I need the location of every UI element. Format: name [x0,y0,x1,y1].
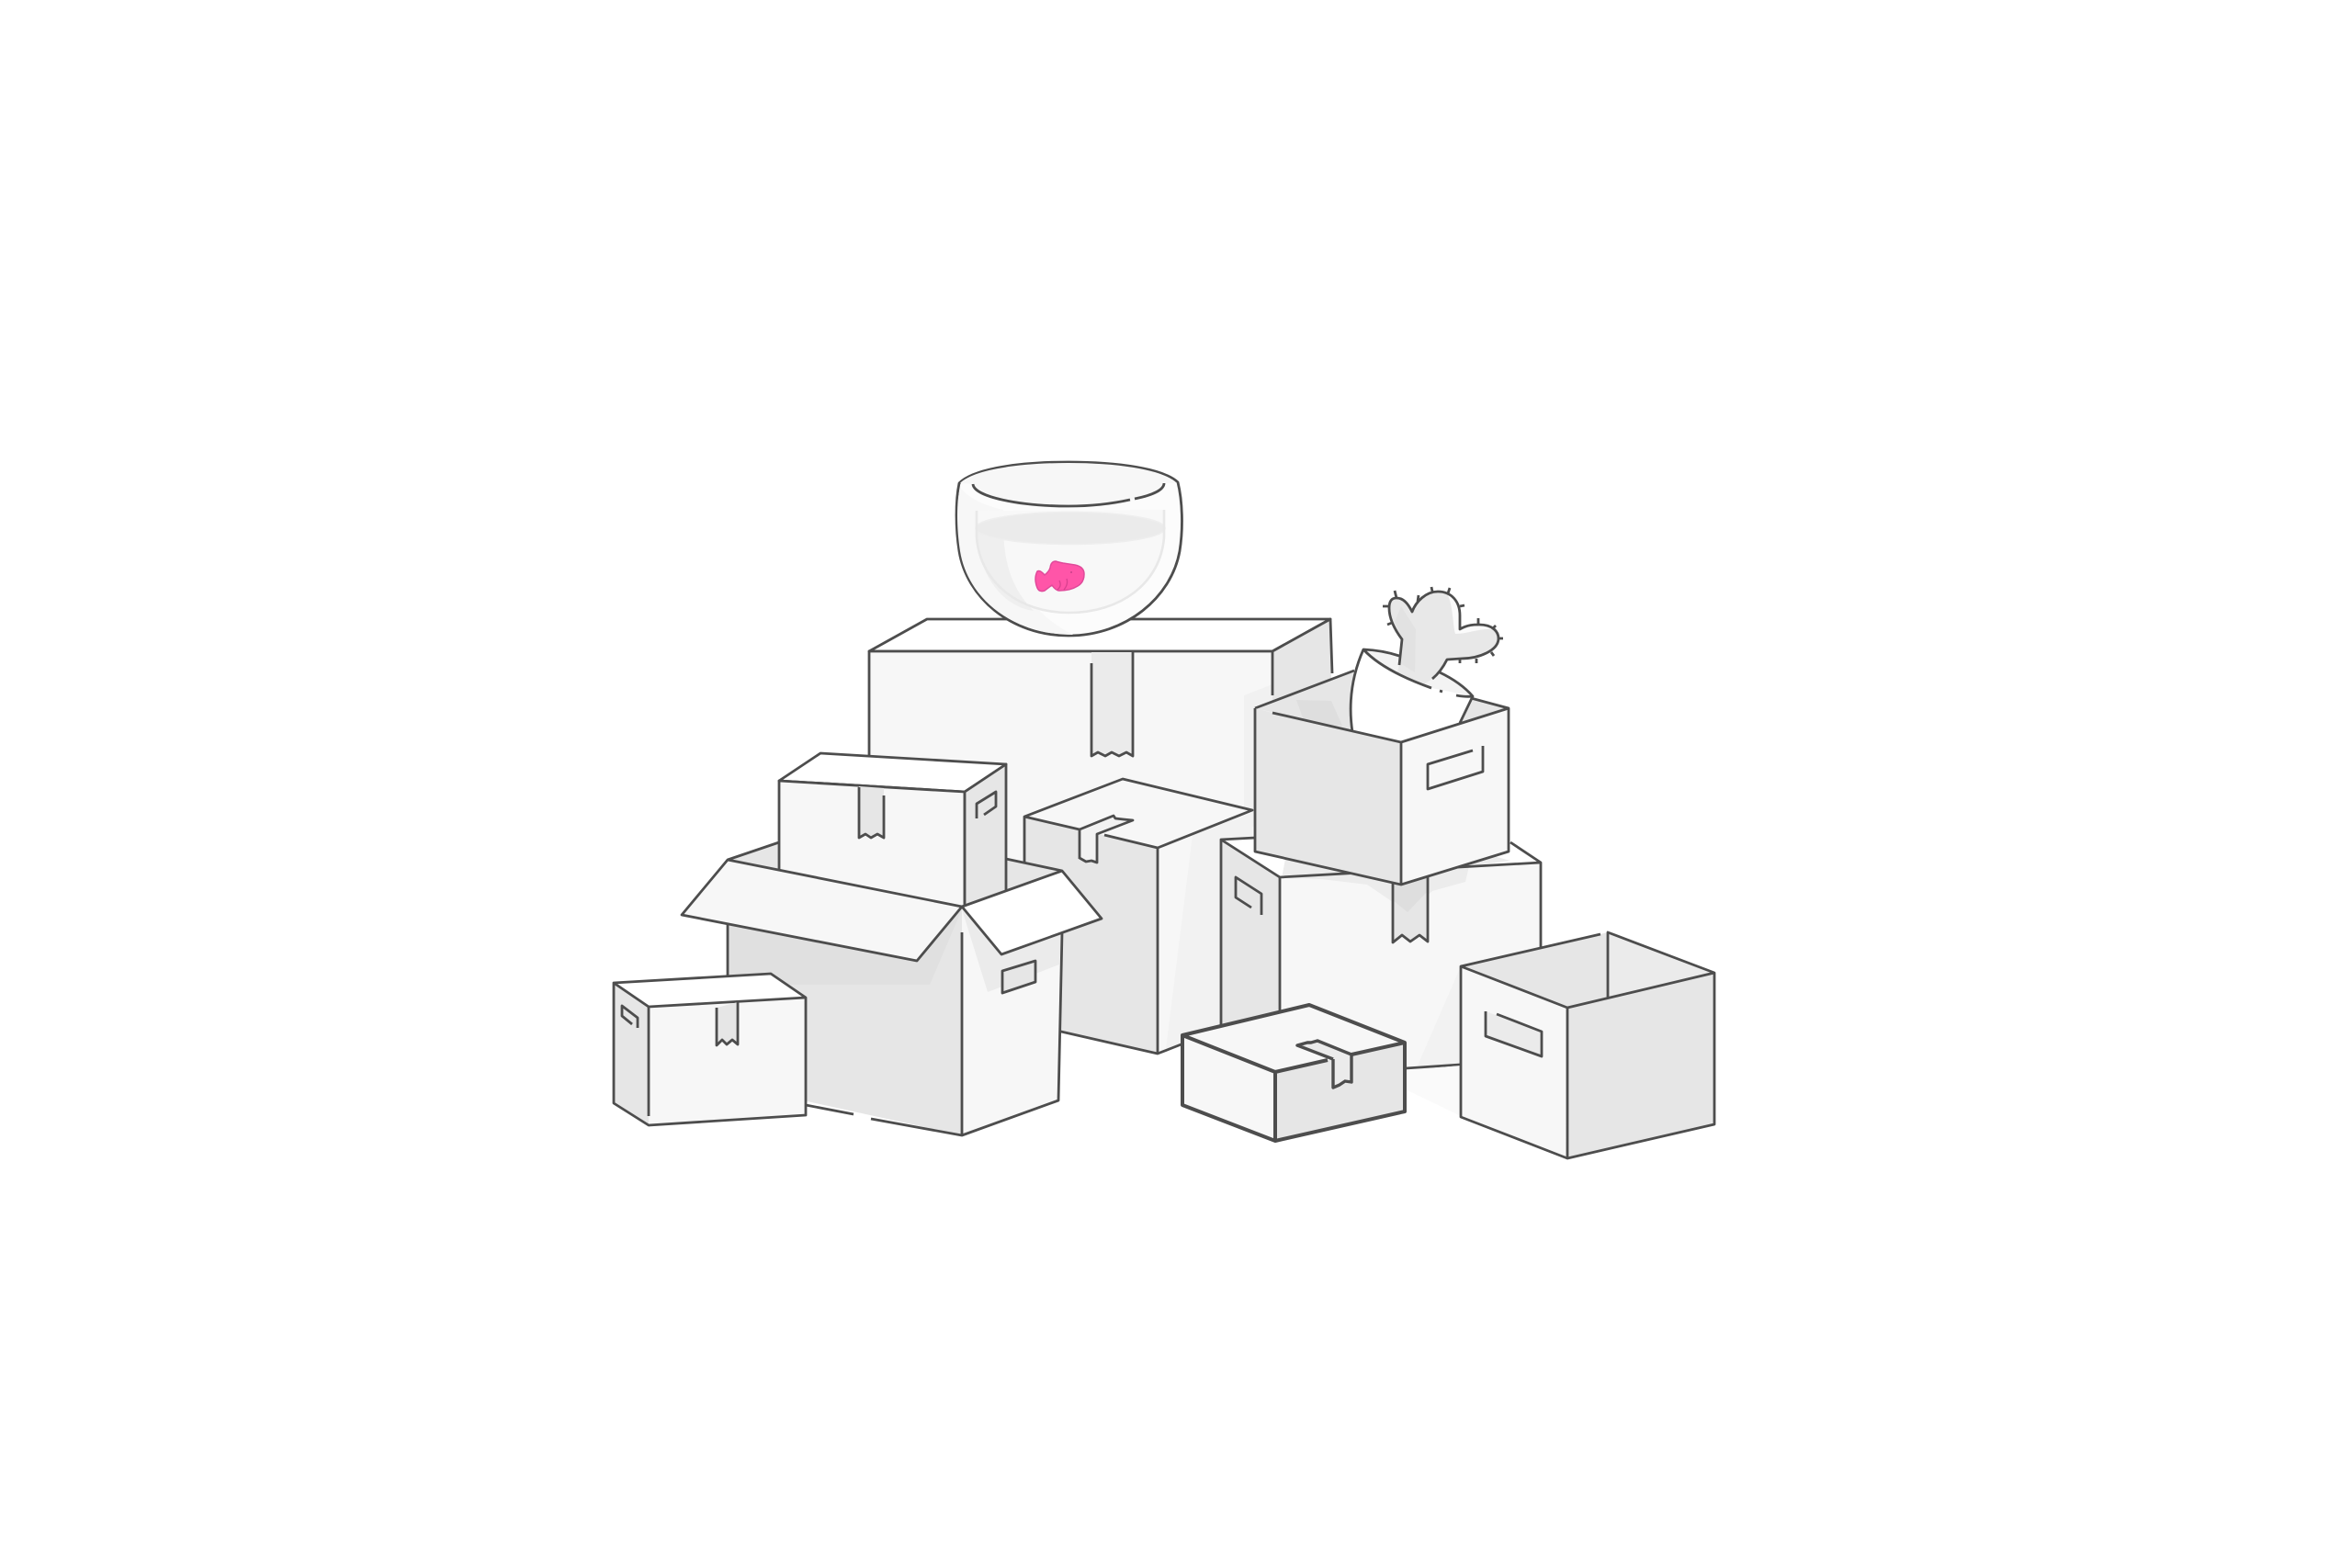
shadow from cactus box [1282,850,1510,912]
tape on small box [717,1002,738,1045]
tape on stacked box [1393,873,1428,942]
small left box [614,974,806,1125]
handle on cactus box [1428,746,1483,789]
open box with flaps: body [682,860,1102,1135]
plant pot [1351,649,1473,742]
handle on small box [622,1006,638,1028]
handle on resting box [977,792,996,818]
tape on resting box [859,786,884,838]
fish [1035,561,1084,592]
handle on stacked box [1236,877,1261,915]
middle box with folded tape [1024,779,1252,1054]
cactus [1383,587,1503,684]
inner glass [977,510,1164,613]
handle on open right box [1486,1011,1542,1056]
left flap [682,860,962,961]
right flap [962,871,1102,954]
tape on large box [1091,652,1133,756]
pot rim interior [1363,649,1473,695]
water surface [976,513,1165,544]
glass left reflection [957,488,1073,635]
cactus spines [1383,587,1503,663]
box resting in open box [779,753,1006,909]
large back box [869,619,1332,919]
fishbowl [956,462,1182,636]
lower right stacked box [1221,838,1541,1075]
small flat box with bold outline [1182,1005,1461,1141]
open box with flaps: back interior [728,842,1062,907]
tape on middle box [1080,816,1158,863]
tape on flat box [1297,1041,1351,1088]
open right box [1461,932,1714,1158]
cactus box [1255,587,1509,885]
bowl rim [960,463,1177,506]
handle on open box [1002,961,1035,993]
